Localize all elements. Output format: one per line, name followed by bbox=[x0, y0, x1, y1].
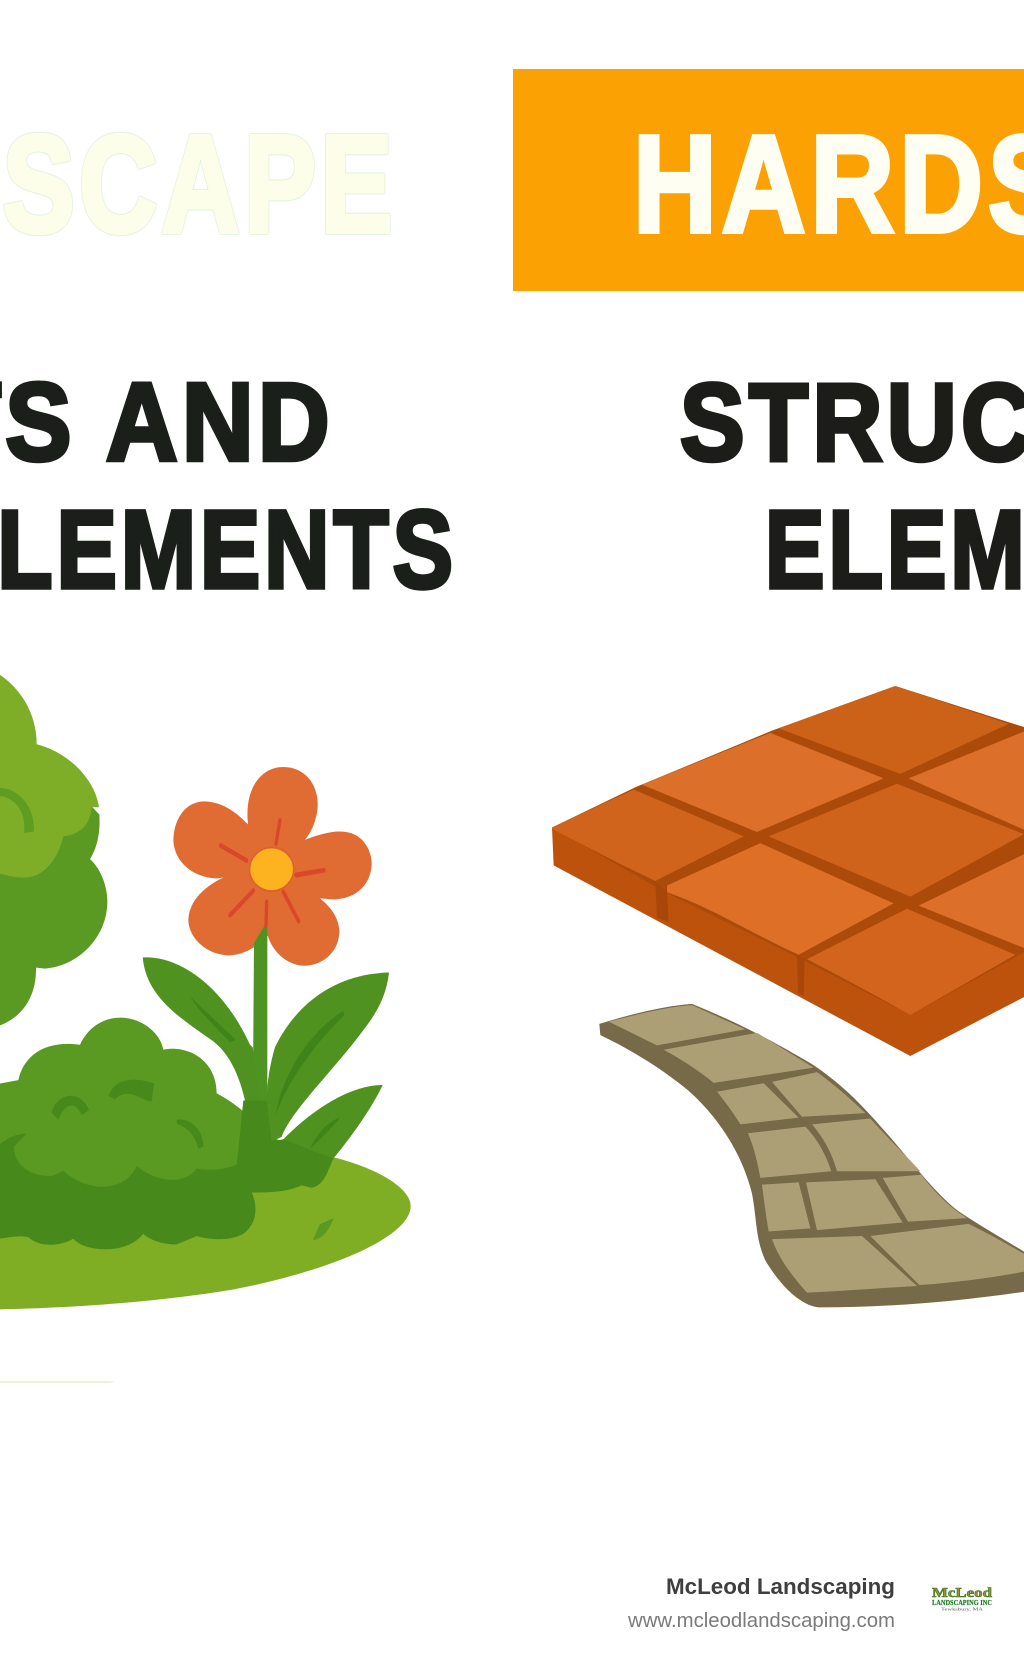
stone path edge bbox=[599, 1004, 1024, 1307]
grass mound bbox=[0, 1158, 411, 1309]
banner: hardscape orange panel bbox=[513, 69, 1024, 291]
flower centre bbox=[250, 847, 294, 891]
upper shrub bbox=[0, 675, 107, 1025]
footer: company name: McLeod Landscaping bbox=[666, 1574, 895, 1599]
footer: website: www.mcleodlandscaping.com bbox=[627, 1610, 895, 1632]
illustration: plants, shrubs and flower on grass bbox=[0, 675, 411, 1309]
heading: structural elements bbox=[680, 360, 1024, 612]
brick slab side bbox=[552, 827, 1024, 1056]
leaves bbox=[143, 957, 389, 1193]
heading: plants and elements bbox=[0, 361, 457, 612]
stone path pavers bbox=[609, 1005, 1024, 1293]
flower stem bbox=[253, 921, 267, 1125]
footer: logo: McLeod bbox=[932, 1586, 992, 1601]
brick slab side joints bbox=[655, 883, 805, 996]
flower petals bbox=[173, 767, 372, 966]
lower shrub bbox=[0, 1018, 333, 1249]
footer: logo bbox=[932, 1586, 992, 1612]
footer: logo: LANDSCAPING INC bbox=[932, 1598, 992, 1607]
faint ground trace bbox=[0, 1381, 115, 1383]
footer: logo: Tewksbury, MA bbox=[941, 1606, 983, 1612]
illustration: hardscape brick slab and stone path bbox=[552, 686, 1024, 1307]
flower petal veins bbox=[221, 820, 324, 926]
brick slab grout bbox=[552, 686, 1024, 1015]
brick tiles bbox=[552, 686, 1024, 1015]
grass tuft bbox=[313, 1218, 333, 1240]
